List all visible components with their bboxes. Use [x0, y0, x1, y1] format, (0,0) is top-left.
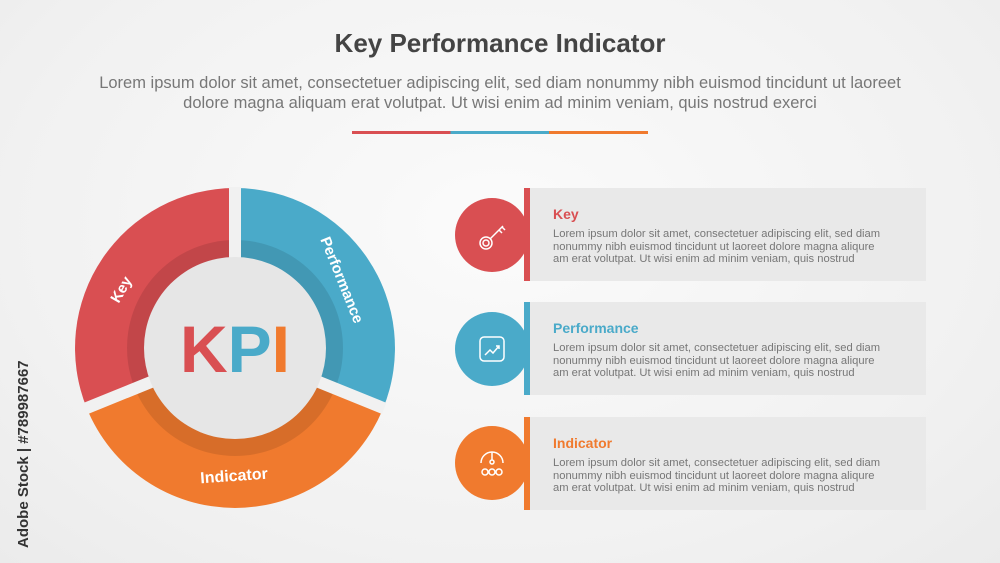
heading: Performance — [553, 320, 639, 336]
label: Key: Key — [107, 273, 136, 306]
segment: Indicator — [87, 348, 383, 508]
icon: key circle — [455, 198, 529, 272]
icon: chart circle — [455, 312, 529, 386]
label: Performance: Performance — [316, 234, 367, 326]
divider: tricolor — [352, 131, 648, 134]
segment: Key — [75, 188, 235, 408]
text: Lorem ipsum dolor sit amet, consectetuer adipiscing elit, sed diam nonummy nibh euismod tincidunt ut laoreet dolore magna aliqure am erat volutpat. Ut wisi enim ad minim veniam, quis nostrud — [553, 457, 880, 494]
heading: Indicator — [553, 435, 612, 451]
chart: KPI ring — [15, 188, 395, 548]
text: Lorem ipsum dolor sit amet, consectetuer adipiscing elit, sed diam nonummy nibh euismod tincidunt ut laoreet dolore magna aliqure am erat volutpat. Ut wisi enim ad minim veniam, quis nostrud — [553, 228, 880, 265]
item: Performance — [455, 302, 926, 395]
item: Key — [455, 188, 926, 281]
label: Indicator: Indicator — [200, 466, 268, 487]
center text: KPI: KPI — [180, 312, 290, 386]
icon: gauge circle — [455, 426, 529, 500]
center circle — [144, 257, 326, 439]
subtitle: Lorem ipsum dolor sit amet, consectetuer adipiscing elit, sed diam nonummy nibh euismod tincidunt ut laoreet dolore magna aliquam erat volutpat. Ut wisi enim ad minim veniam, quis nostrud exerci — [99, 74, 901, 112]
heading: Key — [553, 206, 579, 222]
segment: Performance — [235, 188, 395, 408]
title: Key Performance Indicator — [335, 28, 665, 58]
item: Indicator — [455, 417, 901, 510]
watermark side text: Adobe Stock | #789987667 — [15, 360, 32, 548]
text: Lorem ipsum dolor sit amet, consectetuer adipiscing elit, sed diam nonummy nibh euismod tincidunt ut laoreet dolore magna aliqure am erat volutpat. Ut wisi enim ad minim veniam, quis nostrud — [553, 342, 880, 379]
